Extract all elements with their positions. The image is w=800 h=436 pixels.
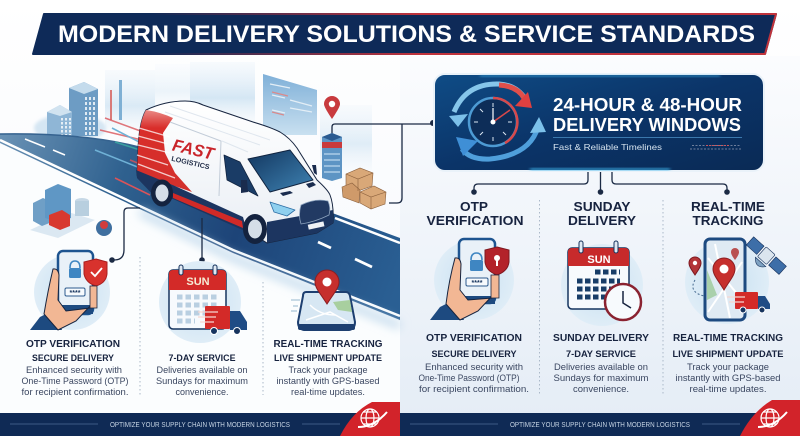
text: left column two (156, 353, 248, 398)
right column headings: DELIVERY (568, 213, 636, 228)
text: left column three: instantly with GPS-based (276, 376, 380, 387)
van roof highlight (165, 106, 270, 152)
icon: globe (358, 409, 387, 427)
right column headings: OTP (460, 199, 488, 214)
footer left (0, 402, 400, 436)
server stack (322, 133, 342, 181)
illustration: dashboard panel (263, 74, 317, 135)
van rear wheel (151, 180, 173, 206)
right column headings: VERIFICATION (426, 213, 524, 228)
text: left column one (22, 338, 128, 398)
text: left column three: Track your package (288, 365, 368, 376)
icon: clock with arrows (449, 84, 546, 159)
text: right column three: REAL-TIME TRACKING (673, 332, 783, 344)
van red rear (137, 110, 192, 192)
van mirrors (241, 165, 317, 193)
van navy skirt (136, 170, 247, 232)
road (0, 134, 400, 320)
illustration: buildings (47, 82, 98, 136)
text: left column one: for recipient confirmation. (22, 387, 128, 398)
text: right column three: Track your package (687, 362, 769, 373)
right column headings (426, 199, 765, 228)
panel: delivery windows: DELIVERY WINDOWS (553, 115, 741, 135)
text: right column three (672, 332, 784, 395)
text: right column three: real-time updates. (690, 384, 766, 395)
footer red corner (340, 402, 400, 436)
dividers (140, 200, 663, 395)
icon: right calendar with clock (561, 241, 643, 326)
van rear stripes (137, 128, 175, 178)
text: right column one: SECURE DELIVERY (432, 349, 517, 360)
icon: right OTP phone: **** (472, 280, 483, 287)
pale ground under the road (0, 144, 400, 416)
warehouse stacks (30, 184, 112, 238)
text: right column one (418, 332, 529, 395)
text: right column three: LIVE SHIPMENT UPDATE (672, 349, 784, 360)
cardboard boxes (342, 168, 386, 209)
van windshield (248, 150, 313, 192)
right column headings: REAL-TIME (691, 199, 765, 214)
text: right column one: One-Time Password (OTP) (418, 373, 520, 384)
text: right column two: 7-DAY SERVICE (566, 349, 636, 360)
footer right (400, 400, 800, 436)
text: right column two: Deliveries available on (554, 362, 648, 373)
text: left column three: REAL-TIME TRACKING (274, 338, 382, 350)
icon: left calendar with truck: SUN (186, 276, 210, 288)
title text: MODERN DELIVERY SOLUTIONS & SERVICE STANDARDS (58, 21, 755, 48)
icon: right tracking phone (685, 236, 787, 324)
text: right column one: for recipient confirmation. (419, 384, 529, 395)
map pin (324, 96, 340, 119)
text: right column two (553, 332, 649, 395)
icon: left OTP phone (30, 251, 110, 330)
van side window (224, 155, 258, 196)
icon: left calendar with truck (159, 261, 247, 343)
van logo LOGISTICS: LOGISTICS (171, 156, 210, 171)
footer text: OPTIMIZE YOUR SUPPLY CHAIN WITH MODERN LOGISTICS (110, 420, 290, 429)
text: right column two: convenience. (573, 384, 629, 395)
van grille (300, 200, 330, 224)
right column headings: TRACKING (692, 213, 764, 228)
footer red corner (740, 400, 800, 436)
subheading: Fast & Reliable Timelines (553, 142, 662, 152)
text: left column three: real-time updates. (291, 387, 365, 398)
text: left column one: OTP VERIFICATION (26, 338, 120, 350)
right column headings: SUNDAY (574, 199, 631, 214)
text: left column three: LIVE SHIPMENT UPDATE (274, 353, 382, 364)
connectors (114, 124, 727, 260)
title banner (33, 14, 776, 54)
text: right column three: instantly with GPS-based (676, 373, 780, 384)
text: left column two: convenience. (176, 387, 228, 398)
panel: delivery windows (434, 74, 764, 171)
van headlight (270, 202, 295, 216)
text: left column two: Deliveries available on (156, 365, 248, 376)
van front wheel (243, 214, 267, 244)
icon: left map pin tablet (291, 270, 355, 330)
text: left column two: Sundays for maximum (156, 376, 248, 387)
van bumper (267, 210, 333, 243)
van side panel (170, 122, 221, 196)
footer text: OPTIMIZE YOUR SUPPLY CHAIN WITH MODERN LOGISTICS (510, 420, 690, 429)
text: left column one: Enhanced security with (26, 365, 122, 376)
icon: globe (758, 409, 787, 427)
van red stripe (173, 193, 243, 228)
icon: left OTP phone: **** (70, 290, 81, 297)
speed lines (95, 118, 165, 195)
van hood vents (280, 182, 316, 196)
text: right column two: Sundays for maximum (554, 373, 649, 384)
icon: satellite (741, 236, 787, 280)
right panel background (400, 56, 800, 416)
heading: 24-HOUR & 48-HOUR (553, 95, 742, 115)
text: left column one: One-Time Password (OTP) (22, 376, 128, 387)
illustration: city backdrop (34, 62, 372, 170)
text: right column one: OTP VERIFICATION (426, 332, 522, 344)
van logo FAST: FAST (171, 136, 217, 164)
connector dots (109, 120, 730, 263)
text: right column one: Enhanced security with (425, 362, 523, 373)
text: right column two: SUNDAY DELIVERY (553, 332, 649, 344)
icon: right calendar with clock: SUN (587, 254, 611, 266)
text: left column one: SECURE DELIVERY (32, 353, 115, 364)
delivery van (136, 101, 333, 244)
icon: right OTP phone (430, 239, 514, 320)
text: left column three (274, 338, 382, 398)
text: left column two: 7-DAY SERVICE (168, 353, 236, 364)
van plate (308, 221, 324, 230)
